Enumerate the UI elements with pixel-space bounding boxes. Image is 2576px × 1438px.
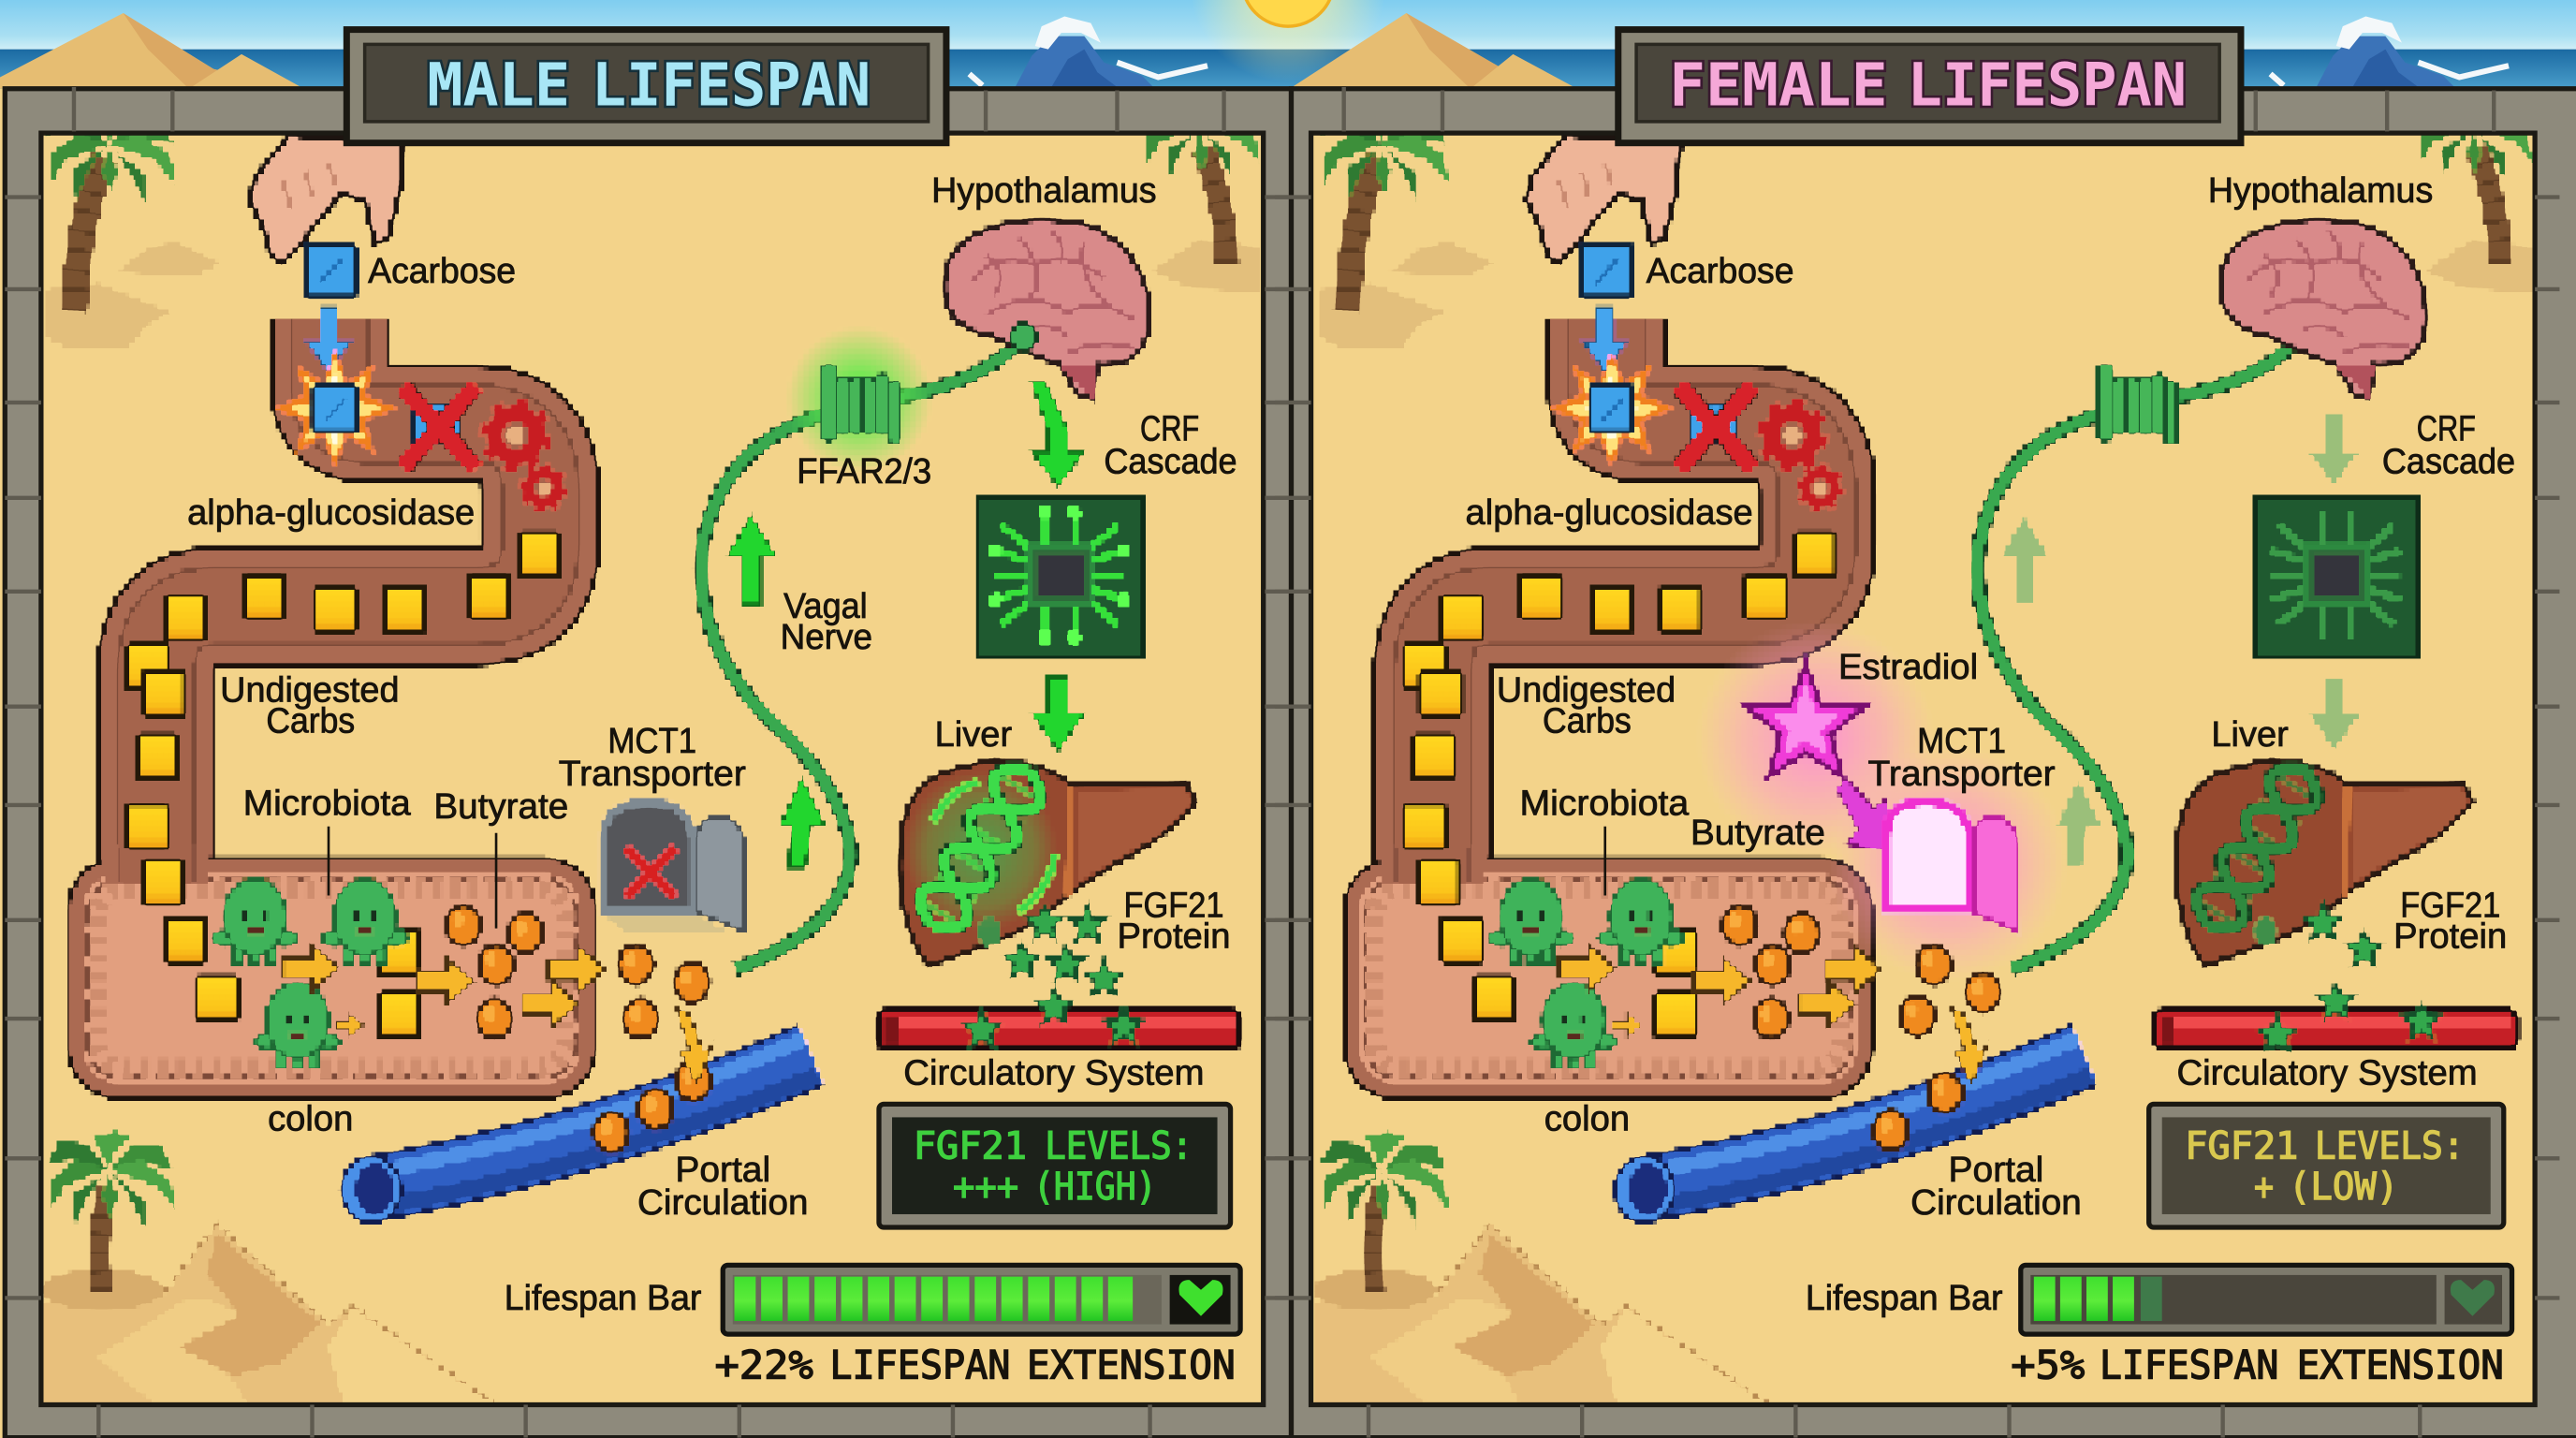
palm bottom-left (46, 1130, 178, 1291)
FGF21 level text: +++ (953, 1165, 1018, 1209)
label: CRF Cascade (2382, 408, 2515, 480)
wave right (2271, 17, 2509, 87)
label: Vagal Nerve: Nerve (781, 617, 872, 656)
arrow: faded CRF (2306, 413, 2359, 485)
sand dunes (1312, 1224, 1769, 1405)
icon: brain (2220, 219, 2426, 399)
label: MCT1 Transporter (559, 721, 746, 793)
label: CRF Cascade: CRF (1140, 408, 1199, 448)
parchment background (33, 125, 1273, 1413)
label: Portal Circulation: Portal (1949, 1150, 2043, 1189)
label: Undigested Carbs (1497, 669, 1676, 741)
label: FGF21 Protein (1117, 885, 1231, 956)
sand dunes (39, 1224, 496, 1405)
parchment background (1303, 125, 2545, 1413)
arrow: faded chip to liver (2308, 677, 2361, 751)
FFAR glow (785, 325, 933, 473)
butyrate outside colon (1900, 945, 2000, 1035)
label: alpha-glucosidase: alpha-glucosidase (1466, 492, 1753, 532)
icon: FFAR2/3 receptor (2098, 365, 2177, 444)
inhibition burst and cross (1549, 350, 1753, 468)
label: Lifespan Bar: Lifespan Bar (1806, 1278, 2002, 1317)
FGF21 protein stars (2259, 903, 2440, 1051)
label: Portal Circulation: Portal (675, 1150, 770, 1189)
sand pyramids right (1290, 13, 1577, 89)
label: Estradiol: Estradiol (1838, 647, 1978, 686)
palm bottom-left (1319, 1130, 1451, 1291)
wave left (970, 17, 1208, 87)
label: alpha-glucosidase: alpha-glucosidase (187, 492, 475, 532)
icon: acarbose tablet (305, 244, 355, 298)
label: Butyrate: Butyrate (1690, 813, 1825, 852)
label: Undigested Carbs: Undigested (1497, 669, 1676, 709)
arrow: acarbose into gut (307, 307, 350, 372)
label: Circulatory System: Circulatory System (2177, 1052, 2478, 1092)
icon: dim heart (2451, 1280, 2495, 1316)
label: Liver: Liver (2211, 714, 2289, 754)
FGF21 level text (914, 1123, 1193, 1209)
FGF21 level text: FGF21 (914, 1123, 1027, 1167)
palm top-left (44, 105, 222, 348)
label: MCT1 Transporter: Transporter (1868, 754, 2056, 793)
butyrate in portal vein (1874, 1073, 1962, 1151)
label: CRF Cascade: Cascade (1104, 441, 1237, 480)
FGF21 level text: (LOW) (2289, 1165, 2398, 1209)
label: CRF Cascade (1104, 408, 1237, 480)
arrow: vagal upper (728, 516, 775, 605)
circulatory system bar (877, 1010, 1240, 1049)
arrow: faded vagal lower (2056, 779, 2101, 868)
label: Vagal Nerve (781, 586, 872, 656)
title: LIFESPAN (592, 50, 871, 119)
label: Portal Circulation (1910, 1150, 2082, 1222)
title: FEMALE (1669, 50, 1888, 119)
arrow: CRF (1032, 381, 1084, 486)
label: Hypothalamus: Hypothalamus (931, 170, 1157, 210)
label: Portal Circulation: Circulation (637, 1182, 809, 1222)
label: Acarbose: Acarbose (1647, 251, 1794, 290)
lifespan bar (723, 1265, 1240, 1334)
microbiota (1488, 879, 1684, 1068)
icon: liver with dim DNA (2175, 756, 2472, 966)
vagal nerve (701, 337, 1023, 969)
icon: alpha-glucosidase gears (487, 405, 564, 508)
stone frame (1275, 87, 2576, 1438)
icon: brain (944, 219, 1150, 399)
label: Liver: Liver (935, 714, 1012, 754)
label: MCT1 Transporter: MCT1 (1917, 721, 2006, 760)
panel: male lifespan (5, 30, 1292, 1438)
label: Circulatory System: Circulatory System (903, 1052, 1204, 1092)
icon: dim chip (2254, 496, 2419, 657)
label: MCT1 Transporter: MCT1 (607, 721, 696, 760)
yellow arrows (283, 945, 605, 1036)
icon: alpha-glucosidase gears (1763, 405, 1840, 508)
icon: hand (250, 135, 404, 263)
icon: hand (1526, 135, 1680, 263)
door glow (1830, 744, 2067, 981)
label: FFAR2/3: FFAR2/3 (797, 451, 931, 491)
label: Vagal Nerve: Vagal (783, 586, 868, 625)
label: Undigested Carbs: Carbs (1543, 701, 1632, 741)
panel: female lifespan (1275, 30, 2576, 1438)
stone frame (5, 87, 1292, 1438)
arrow: faded vagal upper (2001, 516, 2049, 605)
undigested carbs (1404, 534, 1836, 1037)
arrow: estradiol to door (1837, 779, 1893, 851)
label: FGF21 Protein: Protein (1117, 917, 1231, 956)
arrow: chip to liver (1032, 677, 1084, 751)
label: Undigested Carbs: Undigested (220, 669, 399, 709)
icon: liver with glowing DNA (900, 756, 1196, 966)
estradiol glow (1697, 621, 1934, 858)
title plate (346, 30, 946, 143)
icon: closed MCT1 door (600, 801, 744, 933)
palm top-right (1143, 93, 1262, 292)
colon (1345, 846, 1871, 1097)
bar segments (2034, 1277, 2162, 1321)
label: MCT1 Transporter (1868, 721, 2056, 793)
FGF21 level text: + (2254, 1165, 2274, 1209)
lifespan bar (2021, 1265, 2512, 1334)
label: CRF Cascade: Cascade (2382, 441, 2515, 480)
portal vein (1615, 1038, 2091, 1223)
arrow: acarbose into gut (1584, 307, 1627, 372)
label: Lifespan Bar: Lifespan Bar (505, 1278, 701, 1317)
sand pyramids left (0, 13, 304, 89)
FGF21 level text: FGF21 (2185, 1123, 2298, 1167)
FGF21 level text: LEVELS: (2315, 1123, 2465, 1167)
label: FGF21 Protein: FGF21 (2400, 885, 2500, 924)
colon (69, 846, 594, 1097)
lifespan extension: LIFESPAN (2100, 1342, 2278, 1387)
icon: heart (1178, 1280, 1222, 1316)
label: colon: colon (1544, 1098, 1630, 1137)
inhibition burst and cross (272, 350, 476, 468)
gut tube (1432, 317, 1817, 871)
microbiota (212, 879, 407, 1068)
label: Undigested Carbs (220, 669, 399, 741)
FGF21 level panel (2149, 1104, 2504, 1227)
arrow: vagal lower (781, 779, 825, 868)
arrow: butyrate into vein (675, 1005, 713, 1084)
nerve node (1010, 324, 1036, 350)
title: LIFESPAN (1908, 50, 2187, 119)
FGF21 level panel (879, 1104, 1231, 1227)
gut tube (156, 317, 540, 871)
lifespan extension: LIFESPAN (829, 1342, 1010, 1387)
lifespan extension: EXTENSION (2297, 1342, 2504, 1387)
title: MALE (427, 50, 570, 119)
label: FGF21 Protein (2393, 885, 2507, 956)
label: Hypothalamus: Hypothalamus (2208, 170, 2433, 210)
icon: estradiol star (1746, 664, 1865, 777)
icon: open MCT1 door (1886, 801, 2017, 932)
title plate (1618, 30, 2241, 143)
butyrate outside colon (619, 945, 709, 1038)
FGF21 protein stars (964, 903, 1142, 1046)
label: Portal Circulation: Circulation (1910, 1182, 2082, 1222)
sun (1190, 0, 1386, 82)
undigested carbs (127, 534, 560, 1037)
circulatory system bar (2154, 1010, 2517, 1049)
label: MCT1 Transporter: Transporter (559, 754, 746, 793)
palm top-right (2416, 93, 2535, 292)
portal vein (342, 1038, 818, 1223)
label: Undigested Carbs: Carbs (266, 701, 355, 741)
pixel-art scene: male (33, 93, 1273, 1413)
label: CRF Cascade: CRF (2417, 408, 2476, 448)
icon: chip (977, 496, 1142, 657)
palm top-left (1318, 105, 1495, 348)
label: Butyrate: Butyrate (433, 786, 568, 826)
lifespan extension: +22% (714, 1342, 813, 1387)
label: FGF21 Protein: FGF21 (1123, 885, 1224, 924)
lifespan extension: EXTENSION (1027, 1342, 1236, 1387)
butyrate in colon (446, 905, 543, 1038)
icon: acarbose tablet (1582, 244, 1632, 298)
arrow: butyrate into vein (1950, 1005, 1988, 1084)
pixel-art scene: female (1303, 93, 2545, 1413)
FGF21 level text: LEVELS: (1045, 1123, 1193, 1167)
icon: FFAR2/3 receptor (822, 365, 900, 444)
label: colon: colon (268, 1098, 353, 1137)
FGF21 level text: (HIGH) (1033, 1165, 1157, 1209)
FGF21 level text (2185, 1123, 2465, 1209)
label: Acarbose: Acarbose (368, 251, 516, 290)
lifespan extension: +5% (2011, 1342, 2085, 1387)
vagal nerve (1978, 337, 2300, 969)
yellow arrows (1559, 945, 1881, 1036)
label: Portal Circulation (637, 1150, 809, 1222)
bar segments (735, 1277, 1133, 1321)
label: FGF21 Protein: Protein (2393, 917, 2507, 956)
butyrate in colon (1722, 905, 1820, 1038)
label: Microbiota: Microbiota (1519, 783, 1689, 822)
label: Microbiota: Microbiota (243, 783, 411, 822)
background: sky and sea (0, 0, 2576, 89)
butyrate in portal vein (593, 1062, 710, 1152)
